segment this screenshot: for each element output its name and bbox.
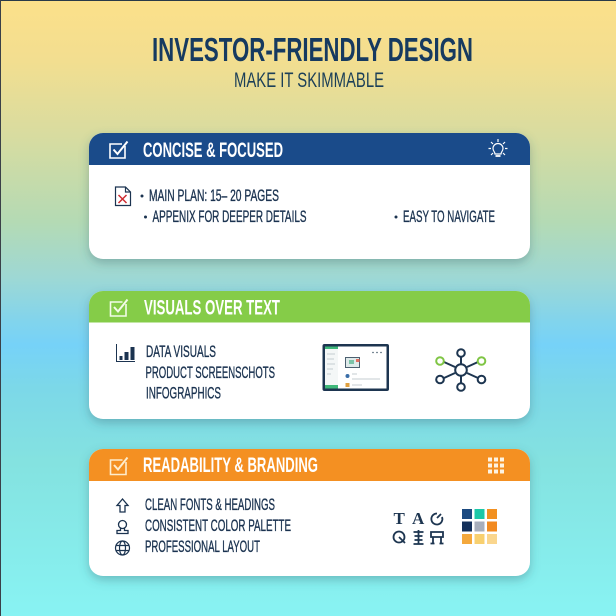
side note <box>394 208 495 226</box>
header bar <box>89 133 530 165</box>
card background <box>89 449 530 576</box>
header text: READABILITY & BRANDING <box>143 454 318 477</box>
header text: CONCISE & FOCUSED <box>143 139 283 162</box>
panel: readability and branding <box>89 449 530 576</box>
icon: typography glyphs <box>394 509 444 544</box>
bullet list <box>140 187 306 226</box>
icon: checkbox <box>110 300 128 316</box>
text list: CLEAN FONTS & HEADINGS <box>145 496 275 514</box>
text list <box>145 496 291 556</box>
card background <box>89 133 530 259</box>
text list: PROFESSIONAL LAYOUT <box>145 538 260 556</box>
panel: concise and focused <box>89 133 530 259</box>
icon: up arrow <box>117 499 128 512</box>
icon: document with cross <box>116 187 130 206</box>
icon: stamp <box>117 520 128 534</box>
side note: EASY TO NAVIGATE <box>403 208 495 226</box>
text list: INFOGRAPHICS <box>146 384 221 402</box>
header bar <box>89 291 530 322</box>
icon: tablet screenshot <box>322 344 389 391</box>
text list: DATA VISUALS <box>146 343 216 361</box>
text list <box>146 343 275 402</box>
title: INVESTOR-FRIENDLY DESIGN <box>152 31 473 68</box>
bullet list: MAIN PLAN: 15– 20 PAGES <box>149 187 279 205</box>
icon: colour palette <box>462 509 497 544</box>
header text: VISUALS OVER TEXT <box>144 296 280 320</box>
icon: globe <box>116 541 130 555</box>
icon: checkbox <box>110 458 128 474</box>
panel: visuals over text <box>89 291 530 419</box>
icon: typography glyphs: A <box>412 509 425 528</box>
bullet list: APPENIX FOR DEEPER DETAILS <box>152 208 306 226</box>
icon: checkbox <box>110 142 128 158</box>
text list: CONSISTENT COLOR PALETTE <box>145 517 291 535</box>
subtitle: MAKE IT SKIMMABLE <box>234 69 384 92</box>
icon: bar chart <box>116 344 135 362</box>
icon: grid <box>488 458 504 474</box>
icon: network <box>436 349 485 391</box>
text list: PRODUCT SCREENSCHOTS <box>146 364 275 382</box>
icon: typography glyphs: T <box>394 509 406 528</box>
card background <box>89 291 530 419</box>
header bar <box>89 449 530 481</box>
icon: light bulb <box>488 139 508 156</box>
